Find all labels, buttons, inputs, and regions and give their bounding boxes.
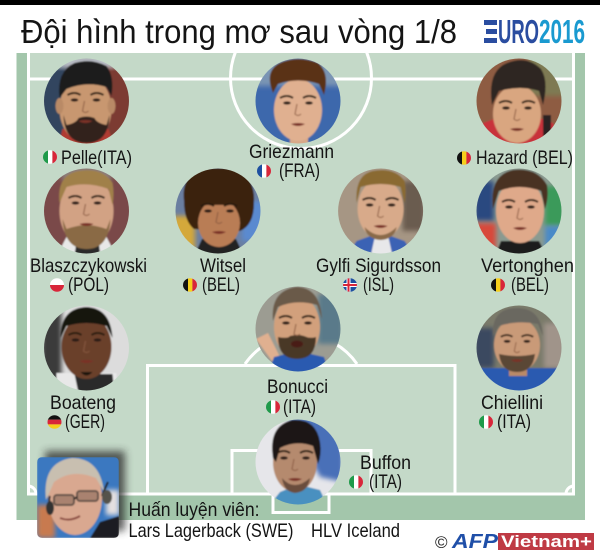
coach panel (37, 451, 400, 542)
copyright symbol: © (435, 533, 448, 552)
label: ITA: (ITA) (283, 396, 316, 418)
logo: Euro 2016: URO (498, 13, 539, 50)
label: Hazard: Hazard (BEL) (476, 147, 573, 169)
player: Witsel (173, 166, 264, 296)
player: Chiellini (474, 303, 564, 433)
label: ITA: (ITA) (497, 411, 531, 433)
source logos (435, 531, 594, 553)
player: Gylfi Sigurdsson (316, 166, 441, 296)
label: Griezmann: Griezmann (249, 141, 334, 163)
label: Pelle: Pelle(ITA) (61, 147, 132, 169)
flag: Italy (266, 400, 280, 414)
label: ISL: (ISL) (363, 274, 394, 296)
flag: Germany (48, 415, 62, 429)
flag: Italy (349, 475, 363, 489)
title: Đội hình trong mơ sau vòng 1/8 (21, 13, 457, 50)
coach heading: Huấn luyện viên: (128, 499, 260, 521)
label: Vertonghen: Vertonghen (481, 255, 574, 277)
player: Blaszczykowski (30, 166, 147, 296)
player: Hazard (457, 56, 573, 169)
photo: Gylfi Sigurdsson (338, 168, 424, 254)
photo: Witsel (176, 168, 260, 254)
flag: Poland (50, 278, 64, 292)
player: Vertonghen (474, 166, 574, 296)
label: Boateng: Boateng (50, 392, 116, 414)
flag: Italy (479, 415, 493, 429)
photo: Boateng (44, 306, 129, 390)
flag: Belgium (491, 278, 505, 292)
photo: Blaszczykowski (44, 168, 129, 254)
top black bar (0, 0, 600, 5)
flag: Belgium (457, 151, 471, 165)
coach photo shadow (45, 451, 125, 531)
label: Blaszczykowski: Blaszczykowski (30, 255, 147, 277)
label: BEL: (BEL) (511, 274, 549, 296)
player: Buffon (253, 417, 411, 507)
player: Boateng (42, 303, 132, 433)
player: Pelle (42, 56, 132, 169)
player: Griezmann (249, 56, 343, 182)
flag: Belgium (183, 278, 197, 292)
photo: Pelle (44, 58, 129, 144)
flag: France (257, 164, 271, 178)
photo: Vertonghen (476, 168, 562, 254)
coach name: Lars Lagerback (SWE) (128, 520, 294, 542)
label: ITA: (ITA) (369, 471, 402, 493)
photo: Bonucci (256, 286, 340, 372)
player: Bonucci (253, 284, 343, 418)
label: Buffon: Buffon (360, 452, 411, 474)
photo: Hazard (476, 58, 562, 144)
photo: Chiellini (476, 306, 562, 390)
label: BEL: (BEL) (202, 274, 240, 296)
label: Witsel: Witsel (200, 255, 246, 277)
coach photo (37, 457, 119, 538)
flag: Iceland (343, 278, 357, 292)
coach role: HLV Iceland (311, 520, 400, 542)
label: GER: (GER) (65, 411, 105, 433)
label: Chiellini: Chiellini (481, 392, 543, 414)
logo: Vietnam+: Vietnam+ (501, 532, 592, 551)
label: Gylfi Sigurdsson: Gylfi Sigurdsson (316, 255, 441, 277)
label: POL: (POL) (68, 274, 109, 296)
photo: Buffon (256, 420, 340, 504)
flag: Italy (43, 150, 57, 164)
label: Bonucci: Bonucci (267, 376, 328, 398)
label: FRA: (FRA) (279, 160, 320, 182)
logo: AFP: AFP (451, 531, 499, 553)
photo: Griezmann (256, 58, 340, 144)
